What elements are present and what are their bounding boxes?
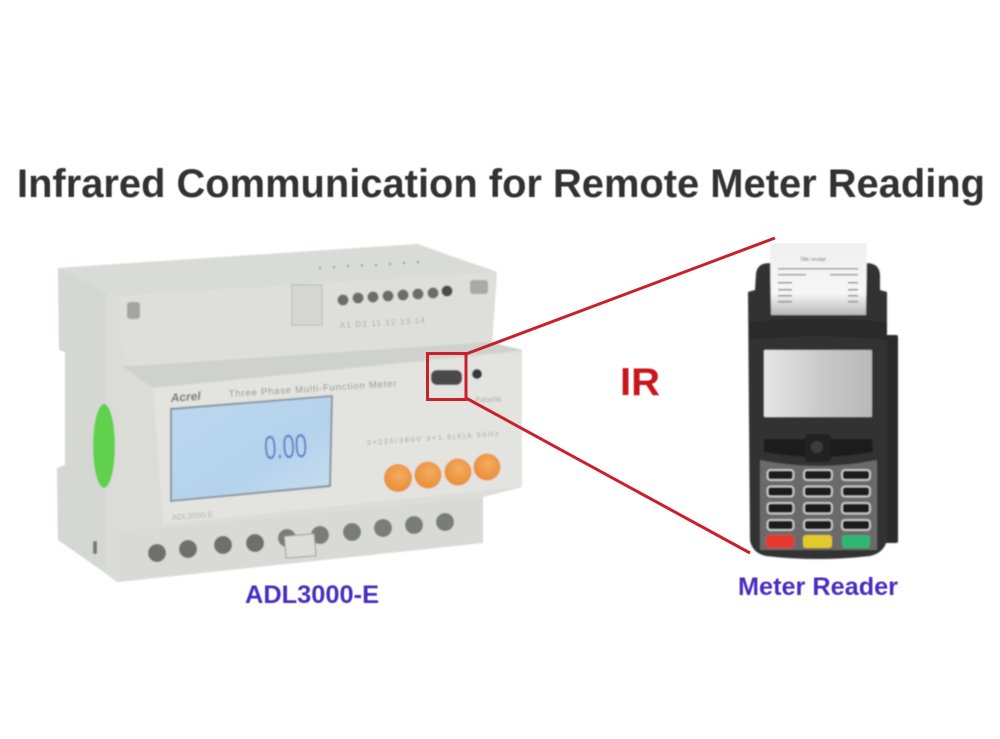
keypad panel: [760, 460, 877, 550]
energy meter device: [57, 244, 522, 582]
green label: [93, 404, 115, 488]
meter labels: ADL3000-E: [172, 510, 213, 522]
highlight box on IR port: [428, 354, 466, 400]
receipt paper: Title receipt: [800, 257, 826, 263]
top face: [58, 244, 497, 296]
top vent dots: [319, 261, 419, 269]
infrared callout lines: [428, 238, 775, 553]
upper terminal block: A1 D2 11 12 13 14: [340, 316, 426, 330]
title: Infrared Communication for Remote Meter Reading: [17, 162, 985, 206]
receipt paper: [770, 243, 867, 315]
meter labels: Acrel: [169, 389, 202, 405]
meter labels: Three Phase Multi-Function Meter: [228, 378, 397, 400]
IR window and LED: [431, 369, 501, 404]
number keys: [768, 470, 870, 530]
orange buttons: [384, 454, 500, 492]
reader body: [748, 263, 887, 559]
LCD reading: 0.00: [263, 427, 308, 466]
label: meter model: ADL3000-E: [245, 581, 379, 609]
navigation keys: [764, 434, 873, 462]
lower terminal block: [117, 497, 483, 582]
front panel: [153, 352, 522, 524]
LCD screen: [170, 395, 333, 502]
meter silhouette: [57, 244, 522, 582]
side housing: [57, 268, 163, 582]
reader screen: [764, 350, 872, 417]
function keys: [766, 535, 870, 548]
side grip: [880, 335, 898, 543]
printer lid edge: [749, 318, 887, 340]
label: meter reader: Meter Reader: [738, 573, 898, 601]
upper terminal block: [120, 272, 522, 388]
IR window and LED: Pulse/IR: [475, 397, 501, 404]
meter labels: 3×220/380V 3×1.5(6)A 50Hz: [367, 431, 499, 447]
handheld meter reader: [748, 243, 898, 559]
meter labels: [169, 378, 499, 522]
IR label: IR: [620, 361, 660, 404]
